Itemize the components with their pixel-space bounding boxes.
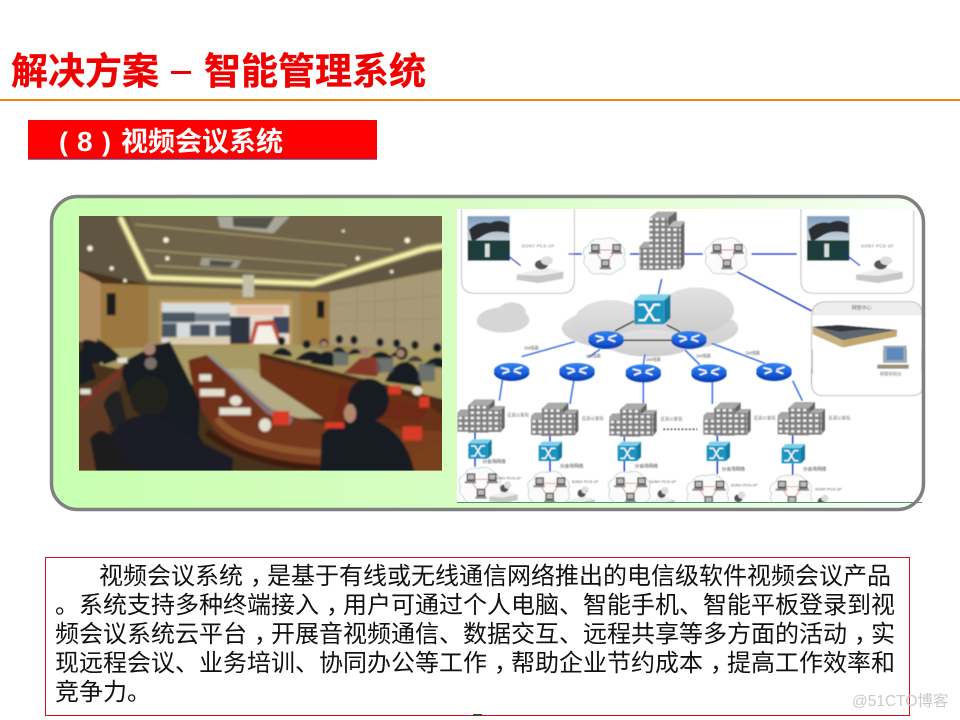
title: 智能管理系统 bbox=[204, 51, 426, 92]
diagram: lower network: 区县公安局 bbox=[661, 416, 682, 423]
diagram: upper network: 2M线路 bbox=[586, 353, 601, 360]
diagram: upper network: 2M线路 bbox=[646, 356, 661, 363]
description text bbox=[55, 563, 895, 706]
description text box bbox=[45, 557, 910, 716]
diagram: lower network: SONY PCS-1P bbox=[731, 482, 758, 487]
panel border bbox=[52, 196, 924, 510]
diagram: lower network: SONY PCS-1P bbox=[815, 487, 842, 492]
diagram: lower network: 区县公安局 bbox=[582, 415, 604, 422]
section heading bar: 视频会议系统 bbox=[121, 127, 283, 157]
description text: 视频会议系统 ，是基于有线或无线通信网络推出的电信级软件视频会议产品 bbox=[99, 563, 891, 590]
network management center: 网管中心 bbox=[852, 305, 872, 312]
diagram: lower network: SONY PCS-1P bbox=[649, 479, 676, 484]
panel background bbox=[52, 196, 924, 510]
panel: video conference illustration bbox=[50, 194, 926, 512]
description text: 。系统支持多种终端接入 ，用户可通过个人电脑、智能手机、智能平板登录到视 bbox=[55, 592, 895, 619]
section heading bar: 8 bbox=[77, 126, 93, 157]
diagram: lower network bbox=[457, 350, 923, 517]
watermark: @51CTO博客 bbox=[852, 693, 948, 710]
diagram: upper network: 2M线路 bbox=[696, 353, 711, 360]
title bbox=[11, 51, 426, 92]
terminal room left bbox=[462, 209, 574, 293]
diagram: upper network bbox=[462, 209, 923, 395]
diagram: upper network: 2M线路 bbox=[524, 345, 539, 352]
diagram: lower network: 分会场网络 bbox=[803, 466, 827, 473]
diagram: lower network: 分会场网络 bbox=[722, 466, 745, 473]
diagram: lower network: SONY PCS-1P bbox=[494, 476, 521, 481]
diagram: lower network: SONY PCS-1P bbox=[572, 479, 599, 484]
section heading bar bbox=[28, 120, 377, 160]
description text: 频会议系统云平台 ，开展音视频通信、数据交互、远程共享等多方面的活动 ，实 bbox=[55, 621, 895, 648]
diagram: lower network: 分会场网络 bbox=[635, 462, 658, 469]
diagram: lower network: 分会场网络 bbox=[482, 458, 506, 465]
diagram: upper network: 2M线路 bbox=[745, 349, 761, 356]
section heading bar: ( bbox=[59, 127, 68, 157]
network management center bbox=[812, 302, 923, 395]
description text: 竞争力。 bbox=[55, 679, 151, 706]
diagram: lower network: 网管控制台 bbox=[880, 371, 902, 378]
diagram: lower network: 区县公安局 bbox=[754, 414, 776, 421]
photo: conference room bbox=[73, 212, 447, 475]
small cloud bbox=[477, 302, 529, 333]
large cloud bbox=[562, 287, 738, 357]
diagram: lower network: 区县公安局 bbox=[507, 412, 529, 419]
network diagram bbox=[457, 209, 923, 517]
small page mark bbox=[473, 714, 482, 716]
diagram: lower network: 分会场网络 bbox=[560, 462, 584, 469]
header divider bbox=[0, 99, 960, 101]
headquarters building bbox=[639, 212, 684, 270]
section heading bar: ) bbox=[102, 127, 111, 157]
diagram: lower network: 区县公安局 bbox=[829, 414, 850, 421]
terminal room right bbox=[801, 209, 914, 293]
title: 解决方案 bbox=[11, 51, 159, 92]
description text: 现远程会议、业务培训、协同办公等工作 ，帮助企业节约成本 ，提高工作效率和 bbox=[55, 650, 895, 677]
